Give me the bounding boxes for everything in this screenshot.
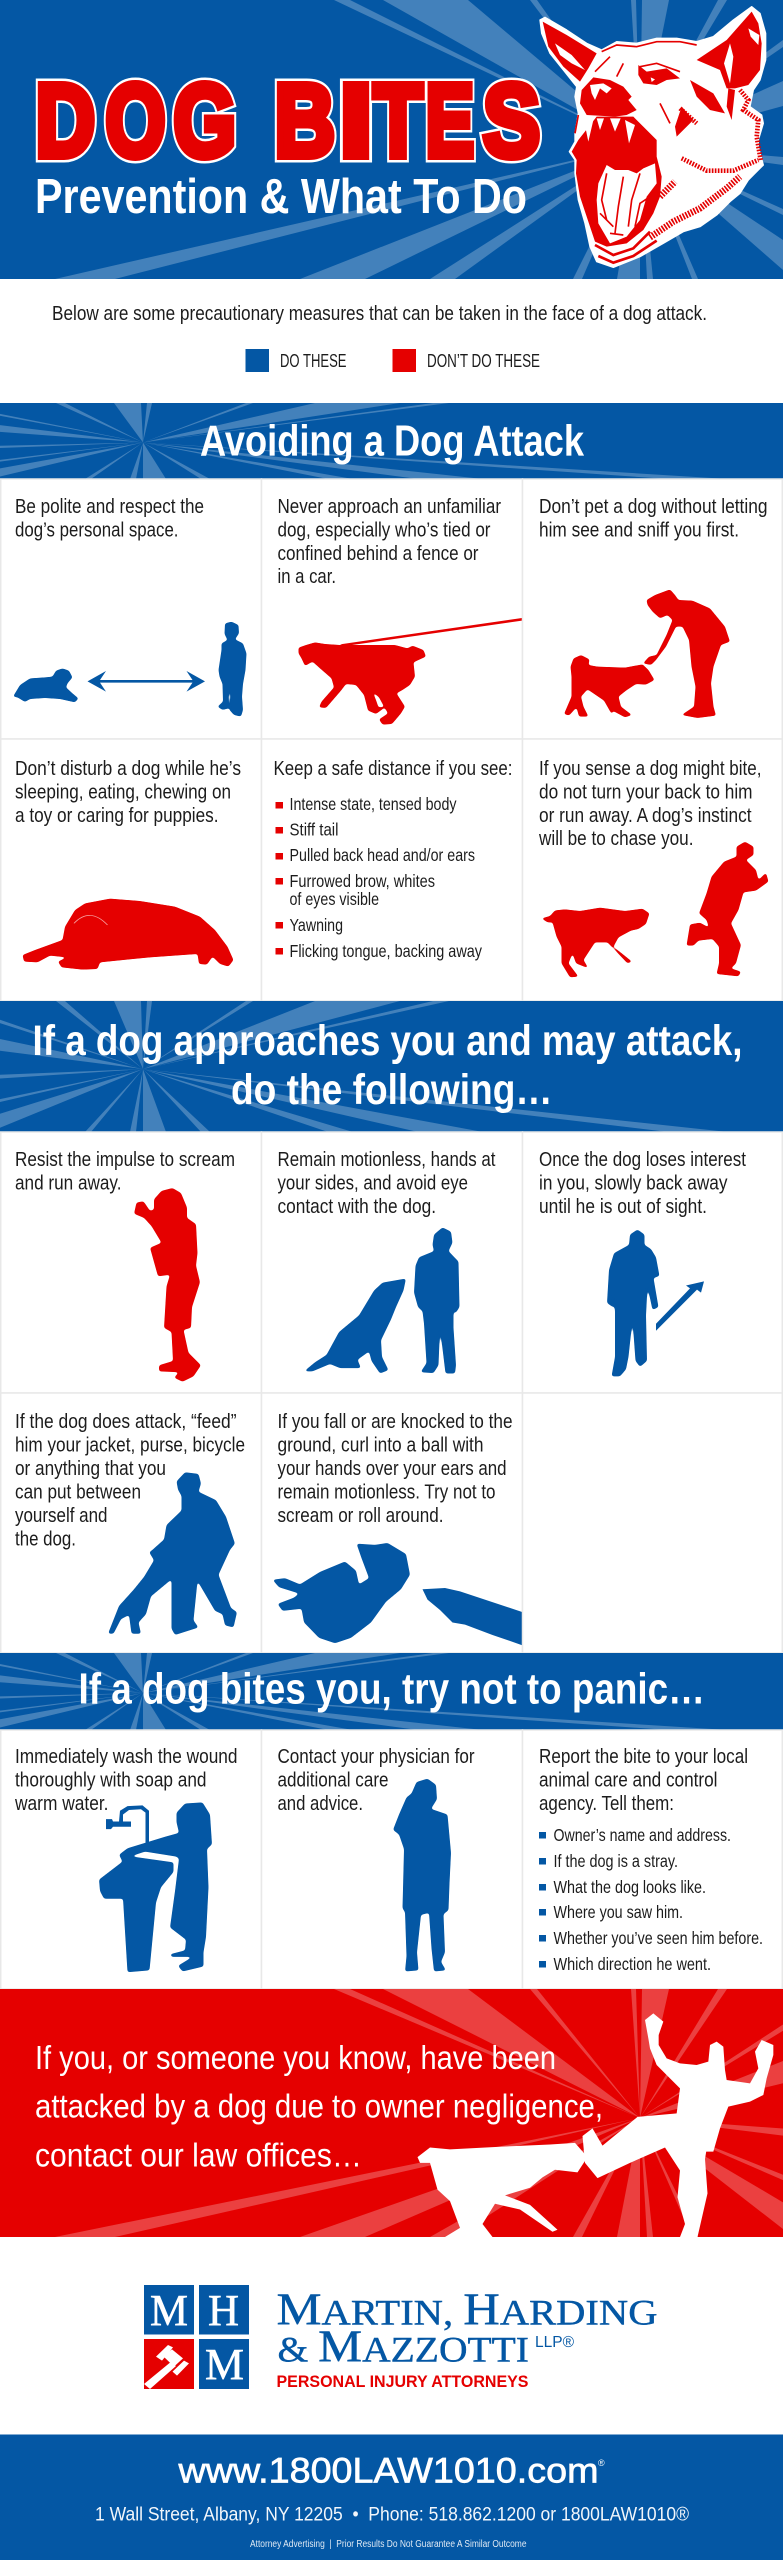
title: Dog Bites: D [36, 63, 95, 178]
panel: don't disturb dog [1, 739, 262, 1001]
text: curl into ball: your hands over your ears and [278, 1457, 506, 1480]
text: contact our law offices [35, 2039, 603, 2174]
logo: Martin, Harding & Mazzotti [144, 2284, 658, 2391]
text: remain motionless: contact with the dog. [278, 1195, 436, 1218]
panel: wash the wound [1, 1730, 262, 1989]
title: Dog Bites: G [174, 63, 236, 178]
text: don't run away: will be to chase you. [538, 827, 694, 850]
legend: don't do these [392, 349, 540, 372]
text: curl into ball [278, 1410, 512, 1527]
text: sniff first [539, 495, 768, 542]
banner: Avoiding a Dog Attack: Avoiding a Dog Attack [200, 416, 584, 466]
banner: If a dog approaches you: do the following… [231, 1066, 552, 1114]
text: curl into ball: If you fall or are knocked to the [278, 1410, 512, 1433]
icon: man kicking [582, 2013, 773, 2237]
banner: If a dog approaches you [0, 1001, 783, 1132]
text: don't run away [538, 757, 762, 850]
text: wash wound: thoroughly with soap and [15, 1768, 206, 1792]
text: unfamiliar dog: dog, especially who’s tied or [278, 518, 491, 542]
text: safe distance heading: Keep a safe distance if you see: [274, 757, 512, 780]
icon: leash [340, 618, 522, 646]
panel: resist the impulse [1, 1132, 262, 1393]
text: unfamiliar dog: Never approach an unfamiliar [278, 495, 501, 518]
panel: don't run [522, 739, 782, 1001]
legend: do these [246, 349, 346, 372]
footer [0, 2434, 783, 2560]
title: Dog Bites: E [426, 63, 474, 178]
logo mark: MHM squares with gavel: M [205, 2340, 244, 2389]
list: warning signs: Stiff tail [290, 820, 338, 840]
text: back away: in you, slowly back away [539, 1172, 728, 1194]
text: report bite: animal care and control [539, 1768, 718, 1792]
text: sniff first: him see and sniff you first. [539, 518, 739, 542]
icon: girl washing at sink [99, 1802, 212, 1972]
text: curl into ball: remain motionless. Try not to [278, 1480, 496, 1504]
title: Dog Bites: B [274, 63, 335, 178]
text: back away: Once the dog loses interest [539, 1148, 746, 1171]
list: what to report: Where you saw him. [554, 1902, 683, 1922]
banner: If a dog bites you [0, 1653, 783, 1730]
icon: dog head [422, 1588, 522, 1645]
text: curl into ball: scream or roll around. [278, 1504, 444, 1527]
icon: sleeping dog [22, 899, 234, 970]
text: report bite: agency. Tell them: [539, 1792, 674, 1815]
text: remain motionless [278, 1148, 496, 1218]
title: Dog Bites: S [483, 63, 540, 178]
legend [246, 349, 540, 372]
icon: man backing away [607, 1229, 660, 1376]
banner: Avoiding a Dog Attack [0, 403, 783, 479]
LLP mark: LLP® [535, 2334, 574, 2351]
website: www.1800LAW1010.com [177, 2452, 598, 2490]
text: remain motionless: Remain motionless, hands at [278, 1148, 496, 1171]
icon: dog, arrow and child [13, 622, 246, 717]
text: feed him: yourself and [15, 1504, 108, 1527]
text: resist impulse: Resist the impulse to scream [15, 1148, 235, 1171]
list: warning signs: of eyes visible [290, 889, 379, 909]
icon: snarling dog head [540, 7, 766, 267]
list: warning signs: Flicking tongue, backing away [290, 941, 482, 961]
logo mark: MHM squares with gavel: M [150, 2286, 188, 2335]
panel: keep a safe distance [262, 739, 522, 1001]
panel: header banner [0, 0, 783, 279]
text: report bite [539, 1745, 748, 1815]
text: resist impulse: and run away. [15, 1172, 122, 1194]
panel: curl into a ball [262, 1393, 522, 1653]
arrow: back away direction [656, 1281, 704, 1331]
text: contact physician [278, 1745, 475, 1815]
text: contact our law offices: attacked by a dog due to owner negligence, [35, 2088, 603, 2124]
list: warning signs: Intense state, tensed body [290, 794, 457, 814]
title: Dog Bites: T [374, 63, 422, 178]
title: Dog Bites: I [340, 63, 372, 178]
title: Dog Bites: O [106, 63, 166, 178]
text: remain motionless: your sides, and avoid eye [278, 1172, 468, 1194]
logo mark: MHM squares with gavel: H [208, 2286, 239, 2335]
icon: man fending off dog [108, 1472, 237, 1635]
subtitle: Prevention & What To Do [35, 170, 527, 224]
text: feed him: If the dog does attack, “feed” [15, 1410, 237, 1433]
panel: red call to action [0, 1989, 783, 2237]
firm name: MARTIN, HARDING [276, 2284, 658, 2334]
firm name second line: & MAZZOTTI [278, 2322, 529, 2372]
icon: screaming woman [134, 1188, 201, 1382]
text: report bite: Report the bite to your local [539, 1745, 748, 1768]
legend: don't do these: DON’T DO THESE [427, 350, 540, 371]
text: don't disturb: a toy or caring for puppies. [15, 804, 218, 827]
text: contact our law offices: If you, or someone you know, have been [35, 2039, 556, 2076]
title: Dog Bites: D [36, 63, 95, 178]
logo mark: MHM squares with gavel [144, 2285, 249, 2389]
legend: do these: DO THESE [280, 350, 346, 371]
list: what to report: If the dog is a stray. [554, 1851, 678, 1871]
text: wash wound: Immediately wash the wound [15, 1745, 238, 1768]
tagline: PERSONAL INJURY ATTORNEYS [276, 2372, 528, 2391]
title: Dog Bites: E [426, 63, 474, 178]
text: contact physician: and advice. [278, 1792, 363, 1815]
list: warning signs [276, 794, 482, 961]
text: contact physician: Contact your physician for [278, 1745, 475, 1768]
disclaimer: Attorney Advertising | Prior Results Do Not Guarantee A Similar Outcome [250, 2539, 527, 2550]
text: curl into ball: ground, curl into a ball with [278, 1434, 484, 1456]
text: feed him: can put between [15, 1480, 141, 1504]
title: Dog Bites: S [483, 63, 540, 178]
panel: let dog sniff first [522, 479, 782, 739]
text: back away: until he is out of sight. [539, 1195, 707, 1218]
icon: dog biting [418, 2143, 588, 2237]
list: what to report: Which direction he went. [554, 1954, 711, 1974]
text: back away [539, 1148, 746, 1218]
text: unfamiliar dog: confined behind a fence or [278, 542, 479, 565]
text: wash wound: warm water. [14, 1792, 108, 1815]
icon: curled person [272, 1543, 410, 1643]
list: what to report: Owner’s name and address. [554, 1825, 731, 1845]
title: Dog Bites [36, 63, 540, 178]
icon: person petting dog [564, 589, 730, 718]
panel: never approach unfamiliar dog [262, 479, 522, 739]
text: contact physician: additional care [278, 1768, 388, 1792]
list: what to report [539, 1825, 763, 1974]
list: warning signs: Pulled back head and/or ears [290, 845, 475, 865]
panel: respect personal space [1, 479, 262, 739]
title: Dog Bites: O [106, 63, 166, 178]
title: Dog Bites: G [174, 63, 236, 178]
title: Dog Bites: B [274, 63, 335, 178]
text: contact our law offices: contact our law offices… [35, 2136, 362, 2174]
panel: feed the dog [1, 1393, 262, 1653]
text: respect space: Be polite and respect the [15, 495, 204, 518]
panel: empty cell [522, 1393, 782, 1653]
list: warning signs: Yawning [290, 915, 343, 935]
title: Dog Bites: I [340, 63, 372, 178]
panel: back away slowly [522, 1132, 782, 1393]
title: Dog Bites: T [374, 63, 422, 178]
text: unfamiliar dog [278, 495, 501, 588]
text: feed him: the dog. [15, 1528, 76, 1550]
icon: woman on phone [393, 1779, 451, 1971]
text: don't disturb: sleeping, eating, chewing on [15, 780, 231, 804]
icon: tied dog [298, 642, 426, 725]
address: 1 Wall Street, Albany, NY 12205 • Phone: 518.862.1200 or 1800LAW1010® [95, 2504, 689, 2526]
list: warning signs: Furrowed brow, whites [290, 871, 435, 891]
panel: contact physician [262, 1730, 522, 1989]
text: don't disturb: Don’t disturb a dog while he’s [15, 757, 241, 780]
icon: dog and standing boy [304, 1227, 460, 1374]
text: feed him [15, 1410, 245, 1550]
panel: remain motionless [262, 1132, 522, 1393]
text: don't disturb [15, 757, 241, 827]
panel: report the bite [522, 1730, 782, 1989]
text: feed him: or anything that you [15, 1457, 166, 1480]
website: ® [598, 2458, 605, 2468]
list: what to report: What the dog looks like. [554, 1877, 706, 1897]
text: unfamiliar dog: in a car. [278, 565, 336, 588]
arrow: keep distance [88, 671, 205, 692]
text: wash wound [14, 1745, 238, 1815]
icon: dog chasing runner [542, 842, 768, 977]
text: respect space [15, 495, 204, 542]
text: resist impulse [15, 1148, 235, 1194]
text: respect space: dog’s personal space. [15, 518, 178, 542]
text: feed him: him your jacket, purse, bicycle [15, 1434, 245, 1456]
